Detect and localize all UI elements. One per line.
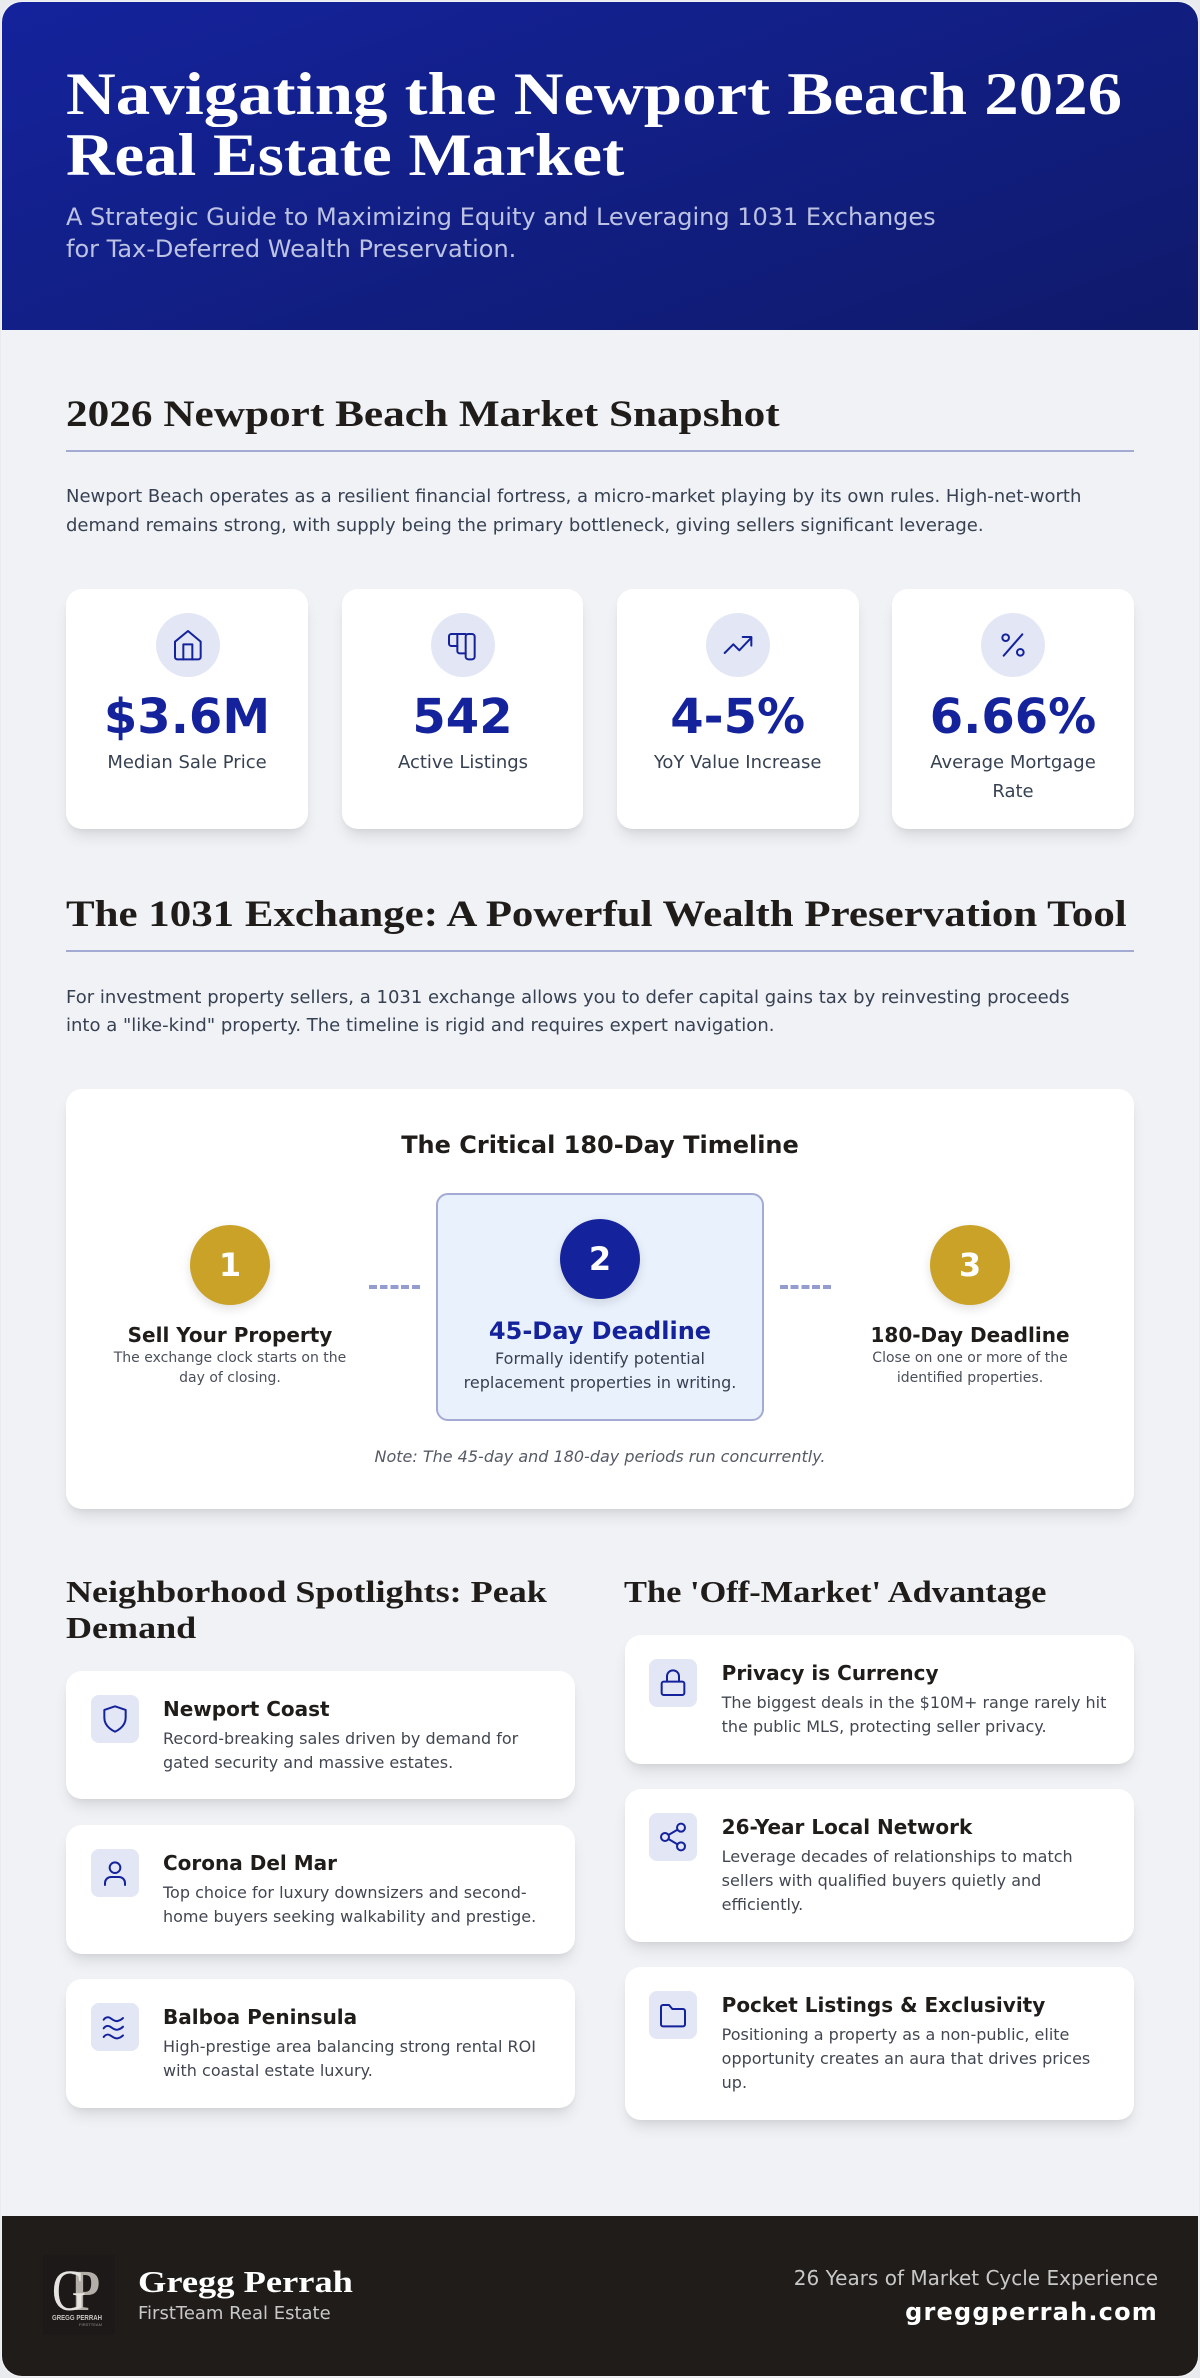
stat value: 4-5% xyxy=(670,689,805,745)
description xyxy=(722,1847,1073,1914)
step 1 text xyxy=(114,1350,346,1386)
subtitle xyxy=(66,203,936,263)
icon: shield xyxy=(90,1694,138,1742)
stat label: YoY Value Increase xyxy=(654,752,821,773)
description: up. xyxy=(722,2073,747,2092)
step 2 text: replacement properties in writing. xyxy=(464,1373,736,1392)
description: home buyers seeking walkability and prestige. xyxy=(163,1907,536,1926)
panel: stat yoy value increase xyxy=(617,589,859,829)
website: greggperrah.com xyxy=(905,2298,1158,2326)
panel: privacy xyxy=(625,1635,1134,1764)
description: High-prestige area balancing strong rental ROI xyxy=(163,2037,536,2056)
logo: GP monogram: P xyxy=(71,2258,100,2323)
heading: 1031 exchange: The 1031 Exchange: A Powerful Wealth Preservation Tool xyxy=(66,894,1127,935)
description: opportunity creates an aura that drives prices xyxy=(722,2049,1090,2068)
step 2 text: Formally identify potential xyxy=(495,1349,705,1368)
text: exchange intro: For investment property sellers, a 1031 exchange allows you to defer capital gains tax by reinvesting proceeds xyxy=(66,986,1069,1008)
brokerage: FirstTeam Real Estate xyxy=(138,2303,331,2324)
description: Positioning a property as a non-public, elite xyxy=(722,2025,1069,2044)
step 1 number: 1 xyxy=(219,1246,241,1284)
icon: trending up xyxy=(706,613,770,677)
text: exchange intro: into a "like-kind" property. The timeline is rigid and requires expert navigation. xyxy=(66,1015,774,1036)
name: Pocket Listings & Exclusivity xyxy=(722,1993,1045,2017)
step 3 number: 3 xyxy=(959,1246,981,1284)
stat value: 6.66% xyxy=(930,689,1096,745)
stat label: Rate xyxy=(992,781,1034,802)
description xyxy=(722,2025,1090,2092)
name: Newport Coast xyxy=(163,1696,330,1720)
stat label xyxy=(930,752,1096,802)
panel: local network xyxy=(625,1789,1134,1942)
panel: stat active listings xyxy=(342,589,583,829)
description xyxy=(163,2037,536,2080)
step 3 text: Close on one or more of the xyxy=(872,1350,1068,1366)
panel: step 2 highlight xyxy=(436,1193,764,1421)
panel: 180-day timeline xyxy=(66,1089,1134,1509)
heading: neighborhood spotlights: Demand xyxy=(66,1610,196,1644)
icon: waves xyxy=(90,2003,138,2051)
text: market intro: Newport Beach operates as a resilient financial fortress, a micro-market playing by its own rules. High-net-worth xyxy=(66,486,1081,507)
heading: off-market advantage: The 'Off-Market' Advantage xyxy=(624,1574,1046,1608)
subtitle: A Strategic Guide to Maximizing Equity and Leveraging 1031 Exchanges xyxy=(66,203,936,231)
icon: share xyxy=(649,1813,697,1861)
panel: newport coast xyxy=(66,1670,575,1799)
arrow: connector 1 xyxy=(369,1285,420,1289)
step 3 number xyxy=(930,1225,1010,1305)
step 2 number xyxy=(560,1219,640,1299)
arrow: connector 2 xyxy=(780,1285,831,1289)
logo: GP monogram: FIRSTTEAM xyxy=(79,2323,102,2327)
step 1 text: day of closing. xyxy=(179,1370,281,1386)
title: Real Estate Market xyxy=(66,122,624,188)
step 3 text xyxy=(872,1350,1068,1386)
description: Top choice for luxury downsizers and second- xyxy=(163,1883,527,1902)
stat label: Average Mortgage xyxy=(930,752,1096,773)
logo: GP monogram: GREGG PERRAH xyxy=(52,2313,102,2322)
panel: stat mortgage rate xyxy=(892,589,1134,829)
description: The biggest deals in the $10M+ range rarely hit xyxy=(722,1693,1106,1712)
icon: folder xyxy=(649,1991,697,2039)
step 1 text: The exchange clock starts on the xyxy=(114,1350,346,1366)
icon: person xyxy=(90,1849,138,1897)
step 1 title: Sell Your Property xyxy=(128,1323,332,1347)
description: Leverage decades of relationships to match xyxy=(722,1847,1073,1866)
name: Corona Del Mar xyxy=(163,1851,337,1875)
panel: stat median sale price xyxy=(66,589,308,829)
step 1 number xyxy=(190,1225,270,1305)
stat value: $3.6M xyxy=(104,689,270,745)
description: gated security and massive estates. xyxy=(163,1752,453,1772)
timeline note: Note: The 45-day and 180-day periods run concurrently. xyxy=(374,1447,826,1466)
description xyxy=(722,1693,1106,1736)
footer band xyxy=(2,2216,1198,2376)
description: the public MLS, protecting seller privacy. xyxy=(722,1717,1047,1736)
footer experience line: 26 Years of Market Cycle Experience xyxy=(794,2266,1158,2290)
icon: listings xyxy=(431,613,495,677)
text: market intro xyxy=(66,486,1081,536)
icon: lock xyxy=(649,1659,697,1707)
step 3 title: 180-Day Deadline xyxy=(870,1323,1070,1347)
step 2 title: 45-Day Deadline xyxy=(489,1317,711,1345)
title xyxy=(66,61,1122,188)
agent name: Gregg Perrah xyxy=(138,2264,353,2299)
panel: balboa peninsula xyxy=(66,1979,575,2108)
heading: neighborhood spotlights xyxy=(66,1574,547,1644)
name: Privacy is Currency xyxy=(722,1661,938,1685)
heading: market snapshot: 2026 Newport Beach Market Snapshot xyxy=(66,394,780,435)
description xyxy=(162,1883,536,1926)
description: with coastal estate luxury. xyxy=(163,2061,373,2080)
icon: percent xyxy=(981,613,1045,677)
name: Balboa Peninsula xyxy=(163,2005,357,2029)
icon: house xyxy=(156,613,220,677)
title: Navigating the Newport Beach 2026 xyxy=(66,61,1122,127)
logo: GP monogram: G xyxy=(52,2258,86,2323)
header banner xyxy=(2,2,1198,330)
timeline heading: The Critical 180-Day Timeline xyxy=(401,1130,799,1158)
stat value: 542 xyxy=(412,689,513,745)
description: efficiently. xyxy=(722,1895,803,1914)
name: 26-Year Local Network xyxy=(722,1815,972,1839)
subtitle: for Tax-Deferred Wealth Preservation. xyxy=(66,235,516,263)
step 3 text: identified properties. xyxy=(897,1370,1043,1386)
step 2 number: 2 xyxy=(589,1240,611,1278)
text: market intro: demand remains strong, with supply being the primary bottleneck, giving sellers significant leverage. xyxy=(66,515,984,536)
text: exchange intro xyxy=(66,986,1069,1036)
stat label: Median Sale Price xyxy=(107,752,267,773)
stat label: Active Listings xyxy=(398,752,528,773)
panel: pocket listings xyxy=(625,1967,1134,2120)
heading: neighborhood spotlights: Neighborhood Spotlights: Peak xyxy=(66,1574,547,1608)
panel: corona del mar xyxy=(66,1825,575,1954)
step 2 text xyxy=(464,1349,736,1392)
description: sellers with qualified buyers quietly and xyxy=(722,1871,1041,1890)
description: Record-breaking sales driven by demand for xyxy=(163,1728,518,1748)
description xyxy=(163,1728,518,1772)
